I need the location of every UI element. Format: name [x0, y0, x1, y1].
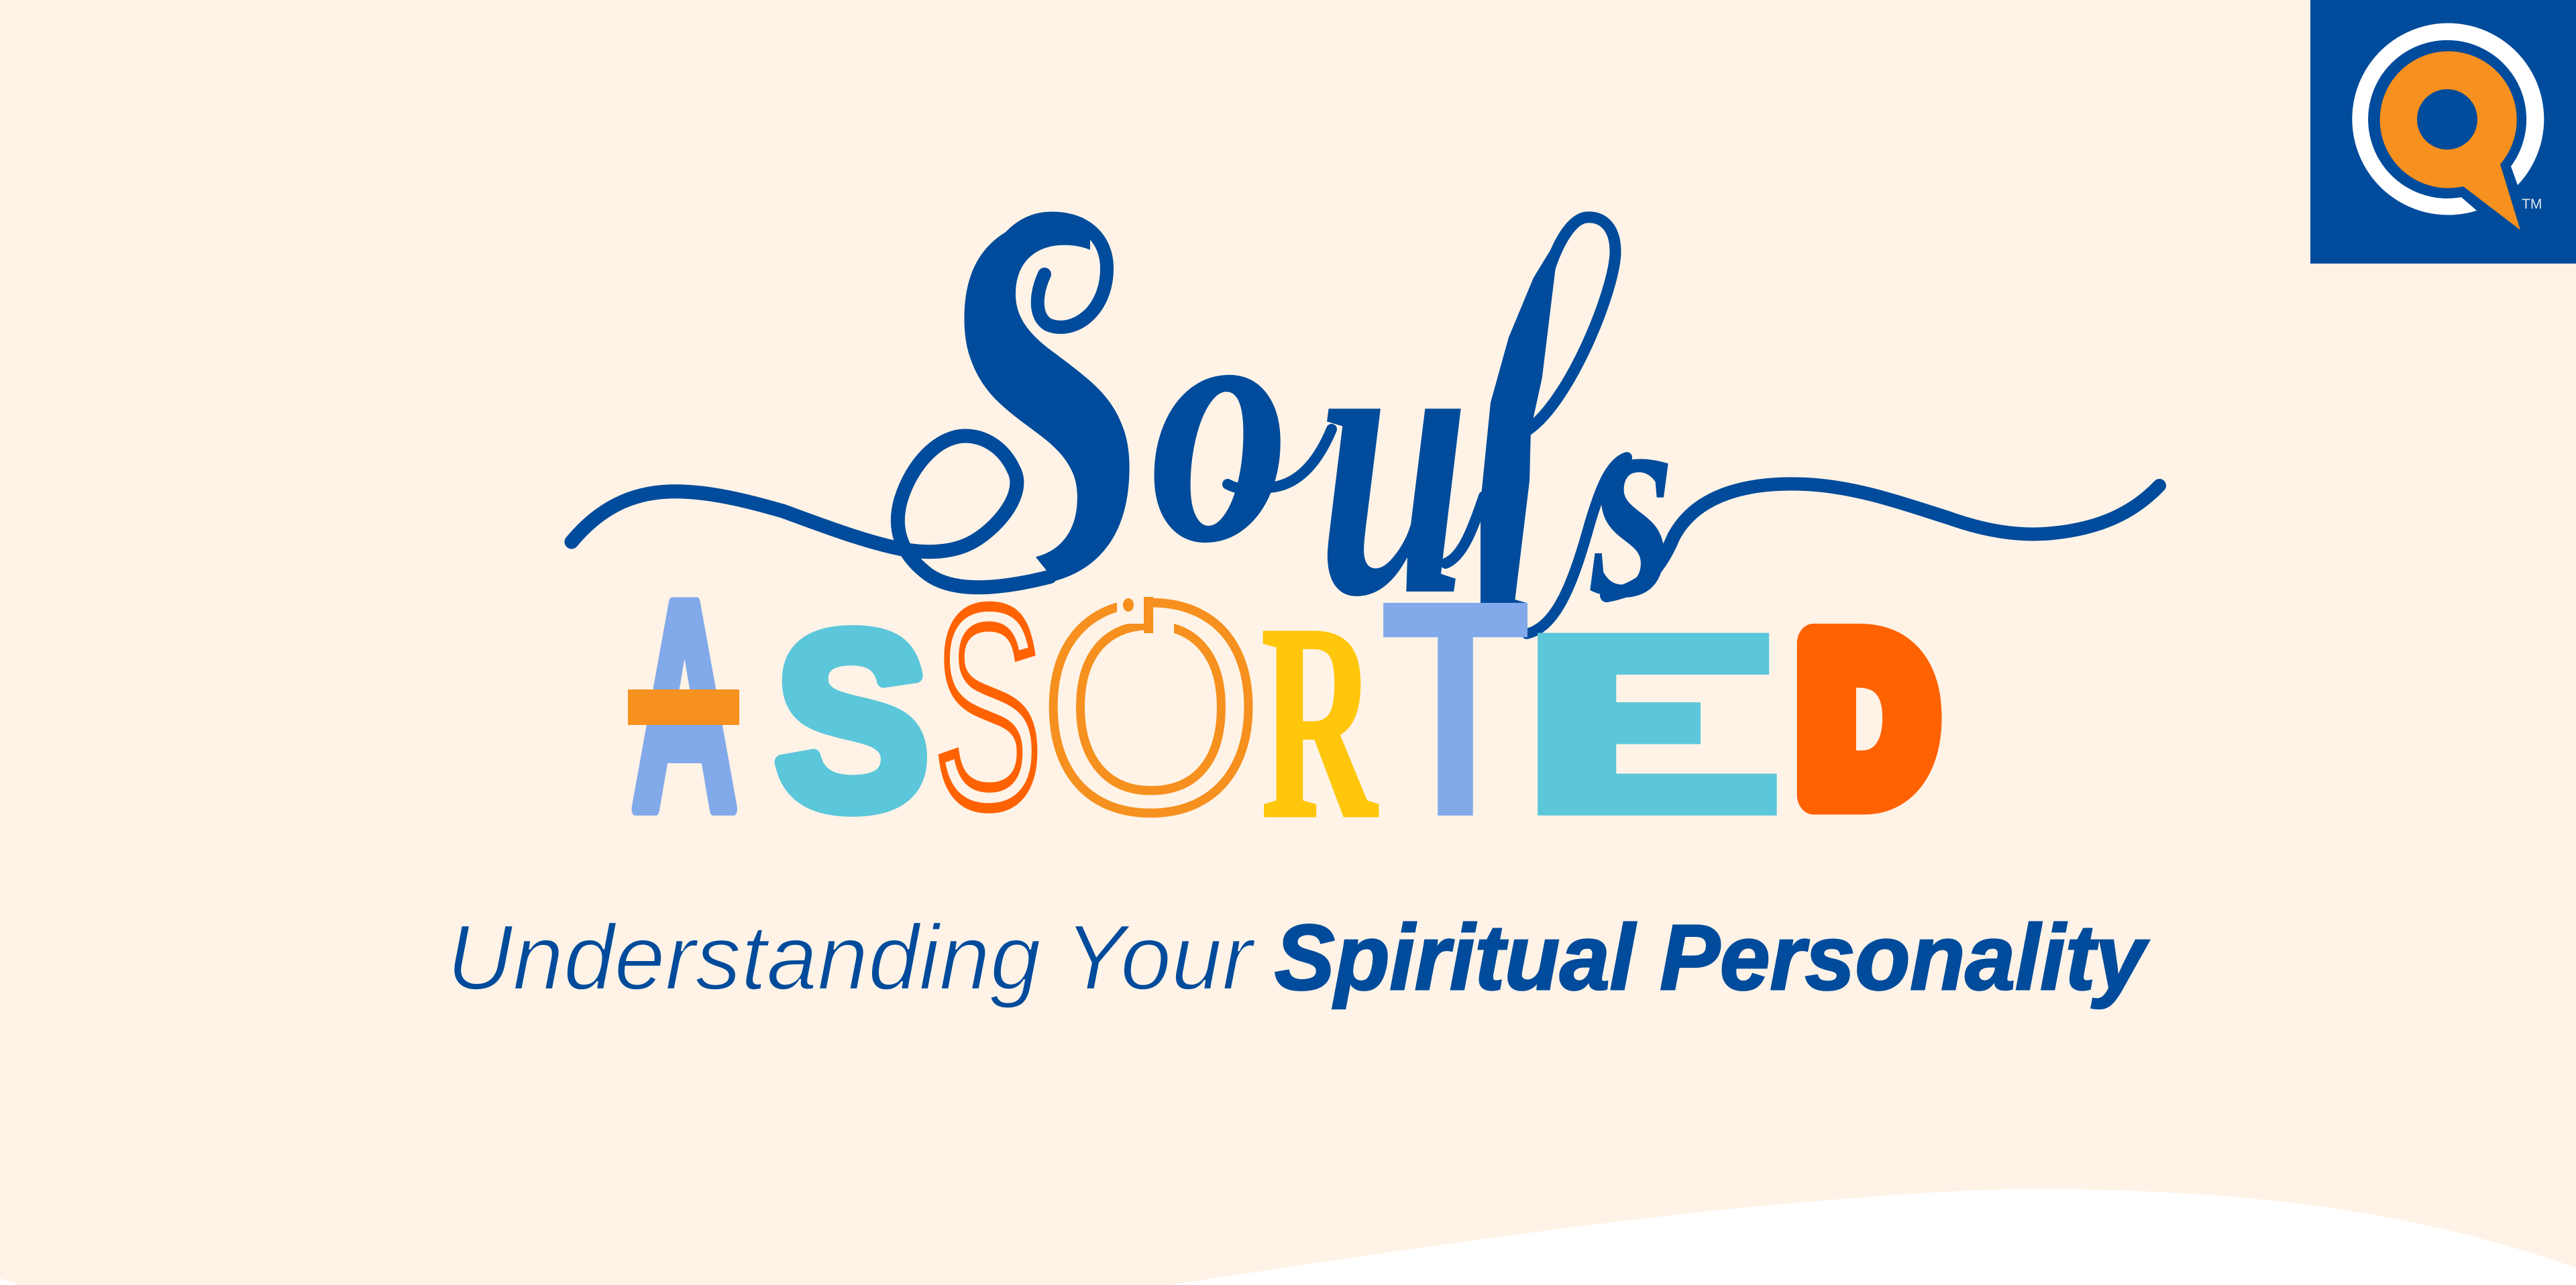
letter R: R [1261, 567, 1379, 877]
flourish: right swash [1607, 484, 2159, 596]
letter l: l [1449, 96, 1564, 757]
flourish: l loop [1527, 217, 1615, 431]
logo orange speech bubble [2380, 51, 2520, 230]
logo white ring [2352, 23, 2544, 215]
trademark: TM [2522, 197, 2542, 212]
letter O double ring: O [1040, 542, 1262, 874]
title block letters: ASSORTED [628, 537, 1933, 883]
orange band across A [628, 689, 739, 725]
flourish: left swash and S lower loop [572, 436, 1050, 588]
letter o: o [1150, 229, 1290, 616]
logo badge [2310, 0, 2576, 264]
title script: Souls [572, 92, 2159, 757]
letter u: u [1317, 237, 1470, 679]
letter S teal: S [775, 582, 929, 862]
subtitle light part: Understanding Your [447, 906, 1256, 1009]
white corner bottom left [0, 1278, 18, 1285]
flourish: S top curl [986, 219, 1107, 327]
letter T: T [1381, 537, 1530, 883]
letter A: A [631, 541, 738, 875]
letter s: s [1589, 338, 1675, 659]
letter S outline: S [934, 549, 1042, 868]
subtitle bold part: Spiritual Personality [1275, 906, 2149, 1009]
letter E: E [1523, 588, 1780, 862]
letter D: D [1801, 597, 1933, 843]
flourish: o to u connector [1228, 429, 1332, 490]
subtitle [447, 906, 2149, 1009]
flourish: u to l connector [1446, 496, 1484, 563]
flourish: s upstroke [1527, 457, 1627, 634]
letter S: S [925, 92, 1155, 702]
white wave at bottom [1169, 1189, 2576, 1285]
